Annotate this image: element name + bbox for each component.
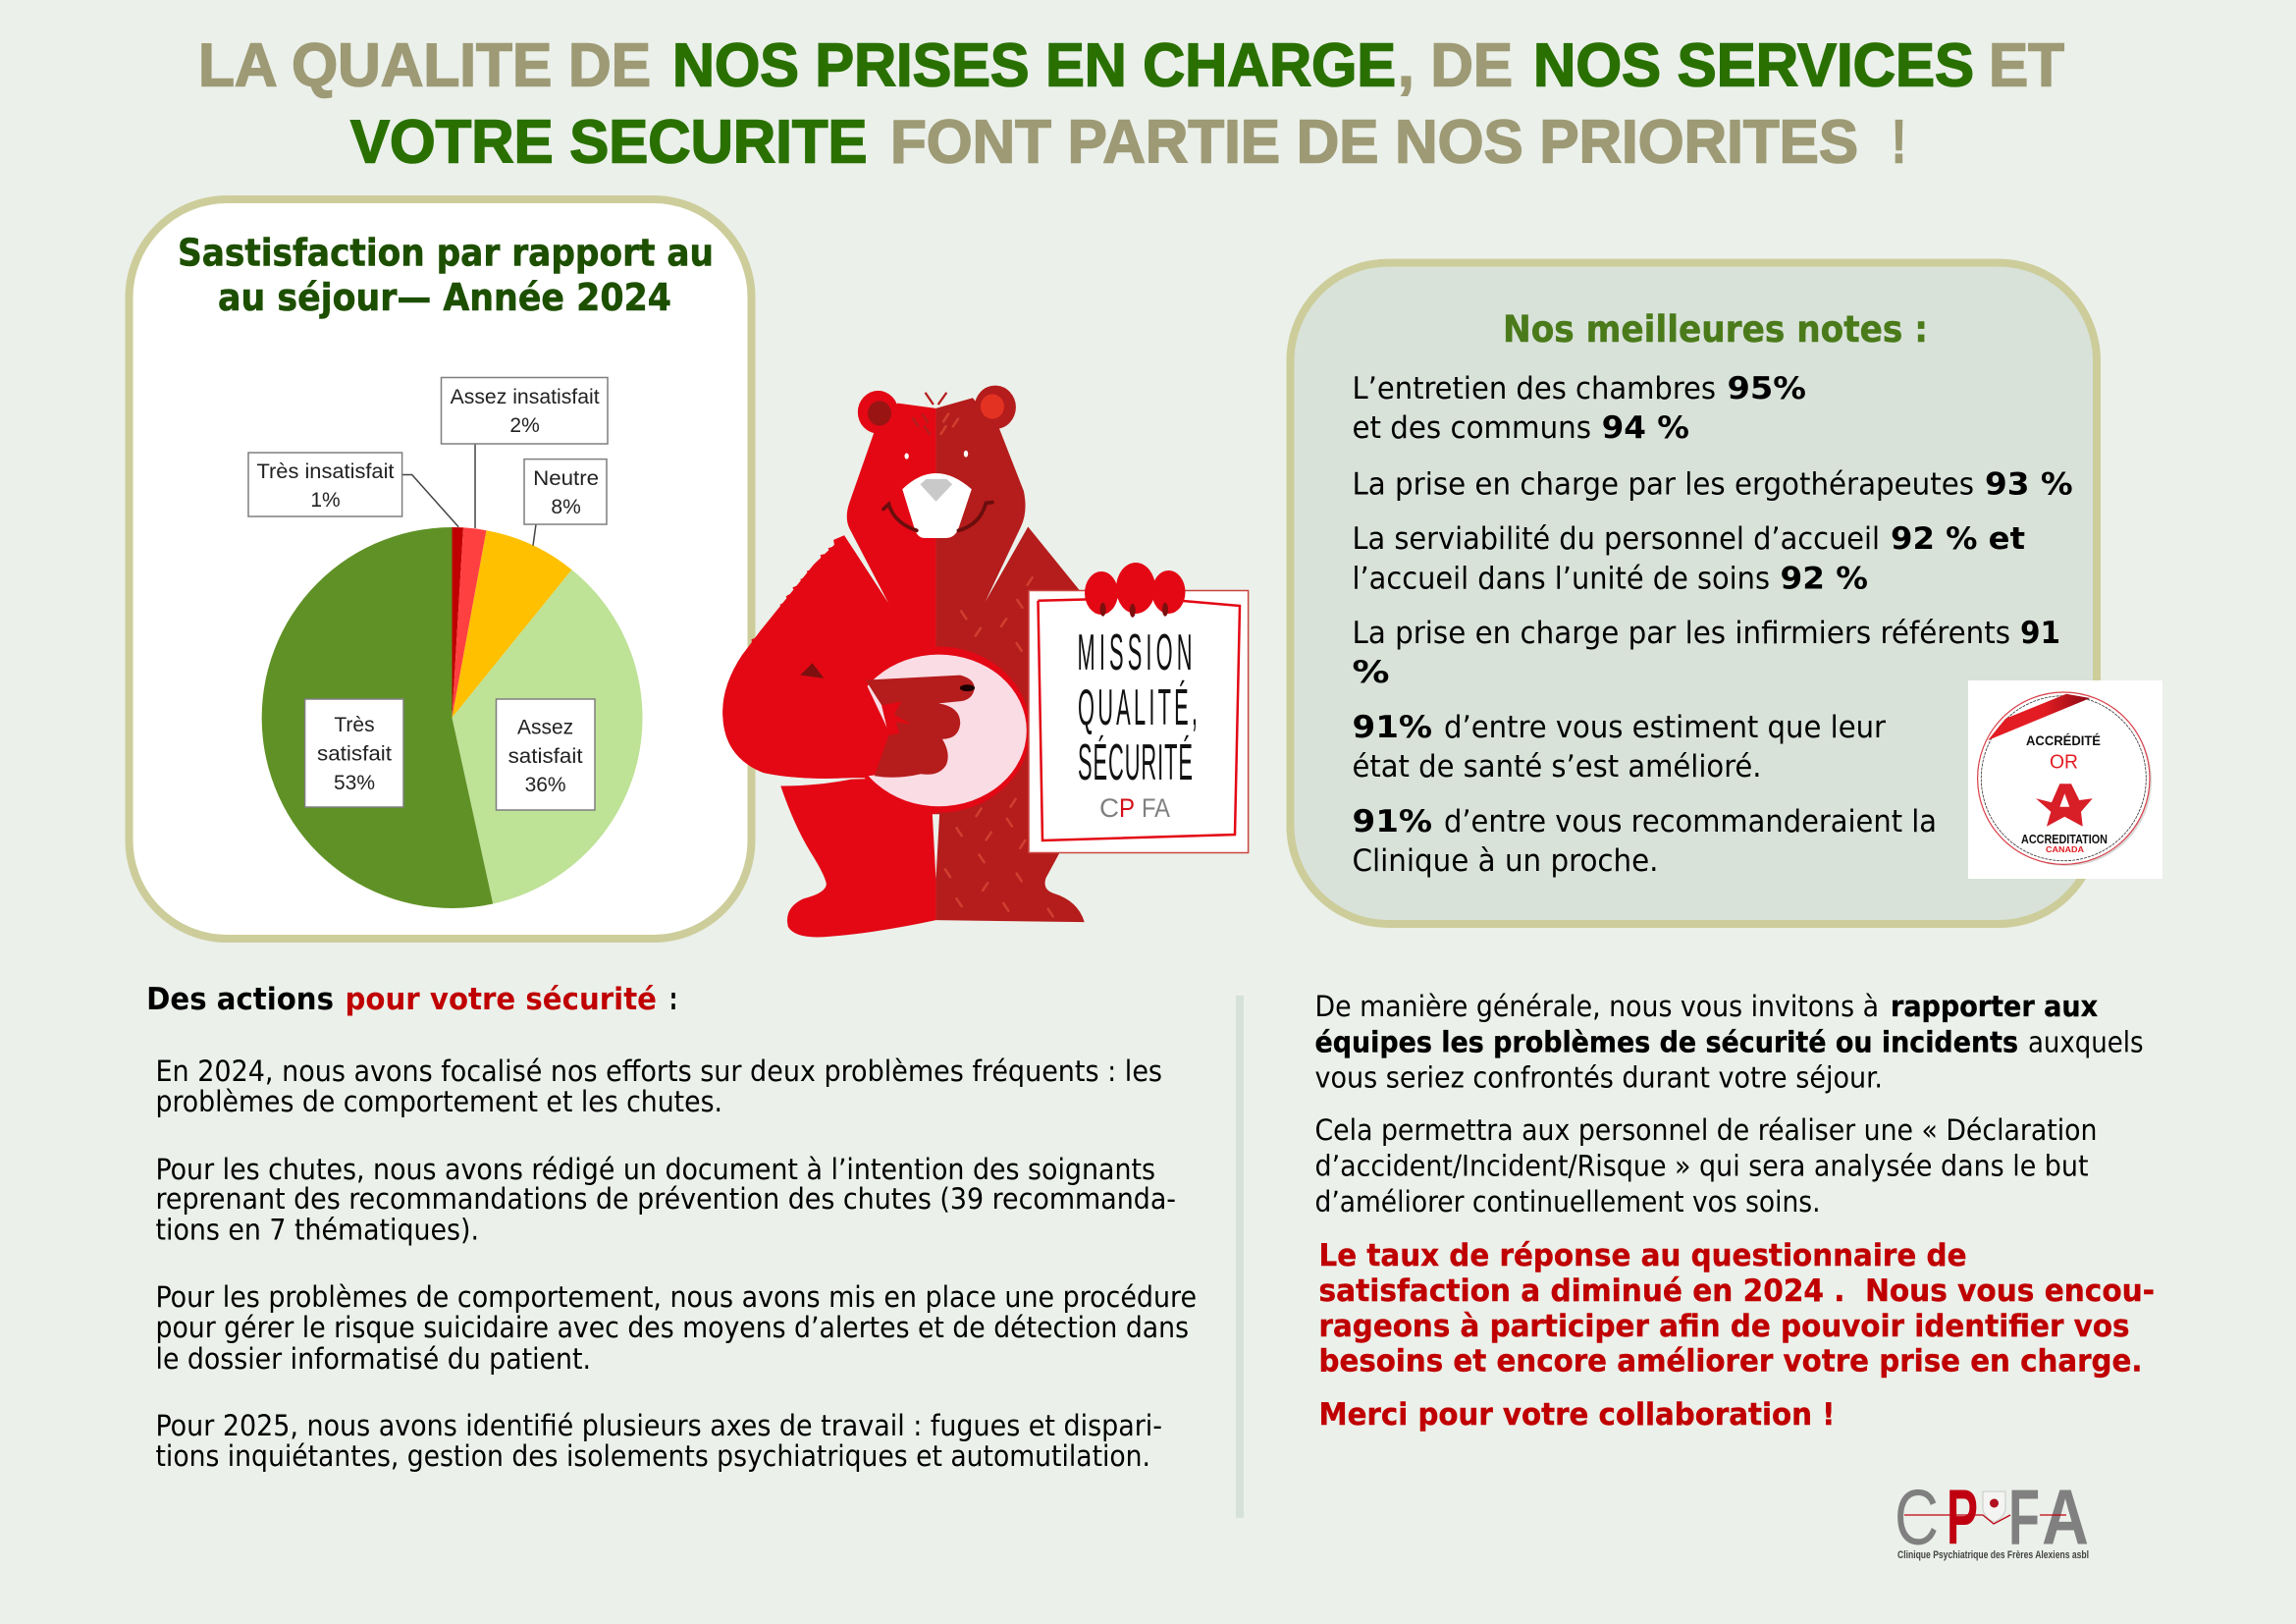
title: FONT PARTIE DE NOS PRIORITES: [890, 109, 1858, 177]
bear: elbow mark: [800, 663, 824, 678]
paragraph: falls: reprenant des recommandations de prévention des chutes (39 recommanda-: [155, 1182, 1176, 1216]
paragraph: declaration: Cela permettra aux personnel de réaliser une « Déclaration: [1315, 1113, 2097, 1147]
panel heading: satisfaction: au séjour— Année 2024: [218, 276, 671, 319]
label: assez satisfait: satisfait: [508, 745, 583, 768]
score: état de santé: d’entre vous estiment que leur: [1444, 710, 1887, 745]
badge: text: [2021, 732, 2108, 854]
score: état de santé: [1353, 710, 1887, 785]
bear: bright upper body: [722, 404, 935, 779]
logo: shield: [1983, 1491, 2005, 1522]
paragraph: falls: [155, 1153, 1176, 1247]
heading: safety actions: :: [669, 982, 677, 1017]
paragraph: 2024 focus: [155, 1055, 1162, 1118]
score: recommandation: [1353, 804, 1937, 879]
paragraph: declaration: [1315, 1113, 2097, 1218]
bear: gap between legs: [933, 814, 939, 879]
title: LA QUALITE DE: [198, 32, 651, 100]
logo: subtitle: Clinique Psychiatrique des Frères Alexiens asbl: [1897, 1549, 2089, 1561]
icon: bear mascot: [722, 386, 1085, 937]
paragraph: report problems: auxquels: [2028, 1026, 2144, 1059]
bear: left leg: [780, 777, 935, 937]
logo: letters: P: [1947, 1474, 1978, 1561]
label: très satisfait: [305, 699, 403, 807]
label: neutre: 8%: [551, 496, 581, 518]
score: ergothérapeutes: La prise en charge par les ergothérapeutes: [1353, 467, 1974, 503]
bear: dark right half: [935, 398, 1085, 922]
section: safety actions: [146, 982, 1197, 1473]
paragraph: behaviour problems: pour gérer le risque suicidaire avec des moyens d’alertes et de détection dans: [155, 1311, 1189, 1344]
label: très insatisfait: [248, 453, 402, 516]
badge: text: ACCREDITATION: [2021, 833, 2108, 846]
label: très insatisfait: 1%: [310, 489, 341, 512]
title: [198, 32, 2064, 177]
pie chart: [262, 527, 642, 908]
paragraph: falls: tions en 7 thématiques).: [155, 1214, 479, 1247]
sign: small logo: FA: [1142, 793, 1170, 823]
bear: brow ticks: [926, 393, 946, 405]
label: très insatisfait: Très insatisfait: [257, 460, 395, 483]
sign: heading text: MISSION: [1078, 624, 1193, 681]
title: ET: [1989, 32, 2064, 100]
heading: safety actions: [146, 982, 677, 1017]
title: , DE: [1398, 32, 1513, 100]
paragraph: 2025 plans: [155, 1409, 1162, 1473]
logo: letters: A: [2042, 1474, 2089, 1561]
score: chambres et communs: [1353, 371, 1806, 446]
logo: letters: [1895, 1474, 2089, 1561]
label: très satisfait: satisfait: [317, 743, 392, 766]
score: recommandation: Clinique à un proche.: [1353, 843, 1659, 879]
paragraph: report problems: [1315, 990, 2144, 1095]
title: NOS PRISES EN CHARGE: [672, 32, 1396, 100]
panel: best scores: [1290, 263, 2097, 924]
score: infirmiers référents: La prise en charge par les infirmiers référents: [1353, 616, 2010, 651]
paragraph: report problems: rapporter aux: [1891, 990, 2098, 1023]
sign: small logo: P: [1119, 793, 1135, 823]
paragraph: declaration: d’accident/Incident/Risque » qui sera analysée dans le but: [1315, 1150, 2089, 1183]
paragraph: declaration: d’améliorer continuellement vos soins.: [1315, 1185, 1820, 1218]
paragraph: report problems: équipes les problèmes de sécurité ou incidents: [1315, 1026, 2018, 1059]
callout: response rate: [1319, 1238, 2155, 1380]
title: NOS SERVICES: [1533, 32, 1974, 100]
paragraph: falls: Pour les chutes, nous avons rédigé un document à l’intention des soignants: [155, 1153, 1155, 1186]
callout: thanks: Merci pour votre collaboration !: [1319, 1397, 1836, 1433]
sign: small logo: C: [1099, 793, 1119, 823]
badge: text: CANADA: [2046, 844, 2084, 854]
label: neutre: [524, 460, 607, 524]
label: assez satisfait: Assez: [517, 717, 573, 738]
badge: text: ACCRÉDITÉ: [2026, 732, 2101, 748]
bear: smile: [883, 503, 992, 530]
paragraph: behaviour problems: [155, 1280, 1197, 1376]
sign: mission qualité, sécurité: [1029, 563, 1249, 852]
badge: text: OR: [2050, 752, 2078, 774]
score: recommandation: d’entre vous recommanderaient la: [1444, 804, 1937, 839]
score: recommandation: 91%: [1353, 804, 1432, 839]
sign: small logo: [1099, 793, 1170, 823]
score: accueil: 92 % et: [1891, 521, 2025, 557]
callout: response rate: Le taux de réponse au questionnaire de: [1319, 1238, 1967, 1273]
bear: arm: [722, 535, 890, 779]
bear: fur marks: [941, 414, 1053, 916]
score: infirmiers référents: 91: [2020, 616, 2060, 651]
score: accueil: [1353, 521, 2025, 597]
logo: letters: C: [1895, 1474, 1939, 1561]
badge: accreditation canada: [1968, 680, 2163, 879]
label: assez insatisfait: 2%: [509, 414, 540, 437]
label: assez insatisfait: [442, 377, 608, 444]
score: chambres et communs: 95%: [1728, 371, 1806, 406]
bear: left ear: [858, 391, 898, 434]
label: très satisfait: Très: [334, 714, 375, 736]
score: état de santé: 91%: [1353, 710, 1432, 745]
bear: belly: [847, 647, 1030, 813]
bear: right ear: [975, 386, 1016, 429]
sign: heading text: [1078, 624, 1198, 791]
label: assez satisfait: [497, 699, 595, 810]
callout: response rate: satisfaction a diminué en 2024 . Nous vous encou-: [1319, 1273, 2155, 1309]
bear: pointing hand: [866, 676, 975, 778]
callout: response rate: rageons à participer afin de pouvoir identifier vos: [1319, 1309, 2130, 1344]
section: reporting incidents: [1315, 990, 2155, 1433]
paragraph: report problems: De manière générale, nous vous invitons à: [1315, 990, 1879, 1023]
panel heading: satisfaction: [178, 232, 714, 319]
title: !: [1892, 109, 1906, 177]
title: VOTRE SECURITE: [350, 109, 868, 177]
paragraph: behaviour problems: Pour les problèmes de comportement, nous avons mis en place une procédure: [155, 1280, 1197, 1314]
panel heading: best scores: Nos meilleures notes :: [1503, 308, 1928, 351]
bear: muzzle: [902, 473, 972, 538]
label: assez insatisfait: Assez insatisfait: [451, 386, 600, 408]
score: chambres et communs: et des communs: [1353, 410, 1591, 446]
sign: hand-drawn frame: [1039, 599, 1240, 840]
logo: CPFA: [1895, 1474, 2089, 1561]
paragraph: 2025 plans: Pour 2025, nous avons identifié plusieurs axes de travail : fugues et dispari-: [155, 1409, 1162, 1442]
score: ergothérapeutes: 93 %: [1985, 467, 2073, 503]
sign: heading text: SÉCURITÉ: [1078, 733, 1193, 791]
paragraph: 2025 plans: tions inquiétantes, gestion des isolements psychiatriques et automutilation.: [155, 1439, 1150, 1473]
bear: eyes: [904, 453, 909, 460]
leader lines: [402, 444, 536, 546]
score: chambres et communs: 94 %: [1602, 410, 1689, 446]
score: accueil: l’accueil dans l’unité de soins: [1353, 562, 1770, 597]
paragraph: behaviour problems: le dossier informatisé du patient.: [155, 1342, 591, 1376]
paragraph: 2024 focus: En 2024, nous avons focalisé nos efforts sur deux problèmes fréquents : les: [155, 1055, 1162, 1088]
heading: safety actions: Des actions: [146, 982, 334, 1017]
sign: heading text: QUALITÉ,: [1078, 678, 1198, 736]
label: assez satisfait: 36%: [525, 774, 566, 796]
callout: response rate: besoins et encore améliorer votre prise en charge.: [1319, 1344, 2142, 1380]
panel heading: satisfaction: Sastisfaction par rapport au: [178, 232, 714, 275]
paragraph: 2024 focus: problèmes de comportement et les chutes.: [155, 1085, 722, 1118]
score: accueil: 92 %: [1781, 562, 1868, 597]
score: infirmiers référents: [1353, 616, 2060, 690]
label: très satisfait: 53%: [334, 772, 375, 794]
paragraph: report problems: vous seriez confrontés durant votre séjour.: [1315, 1061, 1883, 1095]
panel: satisfaction pie chart: [130, 199, 752, 939]
label: neutre: Neutre: [533, 467, 599, 490]
score: infirmiers référents: %: [1353, 655, 1390, 690]
score: accueil: La serviabilité du personnel d’accueil: [1353, 521, 1880, 557]
heading: safety actions: pour votre sécurité: [346, 982, 657, 1017]
logo: letters: F: [2008, 1474, 2040, 1561]
badge: ribbon: [1988, 694, 2090, 740]
badge: star: [2036, 784, 2093, 827]
score: chambres et communs: L’entretien des chambres: [1353, 371, 1716, 406]
bear: paw holding sign: [1085, 563, 1186, 618]
score: état de santé: état de santé s’est amélioré.: [1353, 749, 1761, 785]
